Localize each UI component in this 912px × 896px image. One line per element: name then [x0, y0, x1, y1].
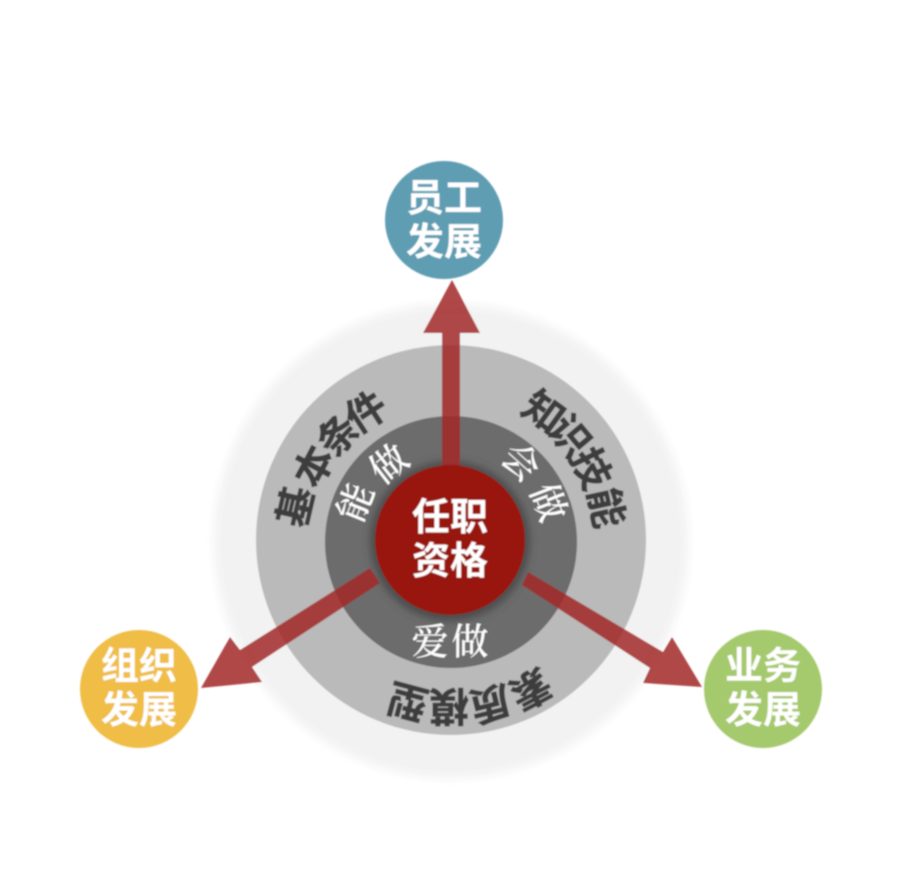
ring label: competency model: 质	[465, 676, 515, 728]
node: employee development: 发展	[406, 222, 482, 264]
ring label: basic conditions: 条	[309, 406, 369, 466]
inner label: know how to do: 做	[521, 478, 574, 528]
ring label: basic conditions: 件	[338, 384, 396, 442]
ring label: basic conditions: 本	[286, 439, 344, 495]
node: business development: 业务	[725, 646, 801, 688]
inner label: love to do: 爱	[412, 622, 448, 664]
node: business development: 发展	[725, 690, 801, 732]
ring label: knowledge and skills: 技	[561, 441, 619, 497]
inner label: know how to do	[493, 435, 574, 528]
inner label: love to do	[412, 622, 488, 664]
diagram: concentric qualification model	[80, 161, 822, 778]
center label: 任职	[412, 497, 488, 539]
center label: 资格	[412, 541, 488, 583]
node: business development	[704, 630, 822, 748]
center label	[412, 497, 488, 583]
ring label: basic conditions: 基	[271, 483, 323, 531]
node: organization development: 发展	[101, 690, 177, 732]
inner label: able to do: 能	[330, 478, 383, 528]
inner ring	[325, 416, 577, 668]
ring label: knowledge and skills: 能	[579, 484, 631, 532]
node: employee development	[385, 161, 503, 279]
arrow: down-right to business development	[522, 572, 702, 687]
center circle	[375, 465, 525, 615]
middle ring	[256, 345, 646, 735]
ring label: competency model	[383, 659, 558, 728]
ring label: basic conditions	[271, 384, 396, 531]
node: employee development: 员工	[406, 178, 482, 220]
node: organization development	[80, 630, 198, 748]
inner label: love to do: 做	[452, 622, 488, 664]
ring label: competency model: 素	[502, 659, 558, 717]
inner label: able to do: 做	[362, 437, 417, 493]
center shadow	[370, 461, 530, 621]
inner label: able to do	[330, 437, 417, 528]
outer ring	[214, 304, 688, 778]
inner label: know how to do: 会	[493, 435, 548, 491]
ring label: competency model: 模	[429, 683, 469, 727]
ring label: competency model: 型	[383, 674, 433, 726]
ring label: knowledge and skills: 识	[539, 408, 599, 466]
ring label: knowledge and skills	[514, 383, 631, 532]
ring label: knowledge and skills: 知	[514, 383, 572, 443]
arrow: down-left to organization development	[201, 568, 380, 688]
node: organization development: 组织	[101, 646, 177, 688]
arrow: up to employee development	[423, 280, 480, 466]
